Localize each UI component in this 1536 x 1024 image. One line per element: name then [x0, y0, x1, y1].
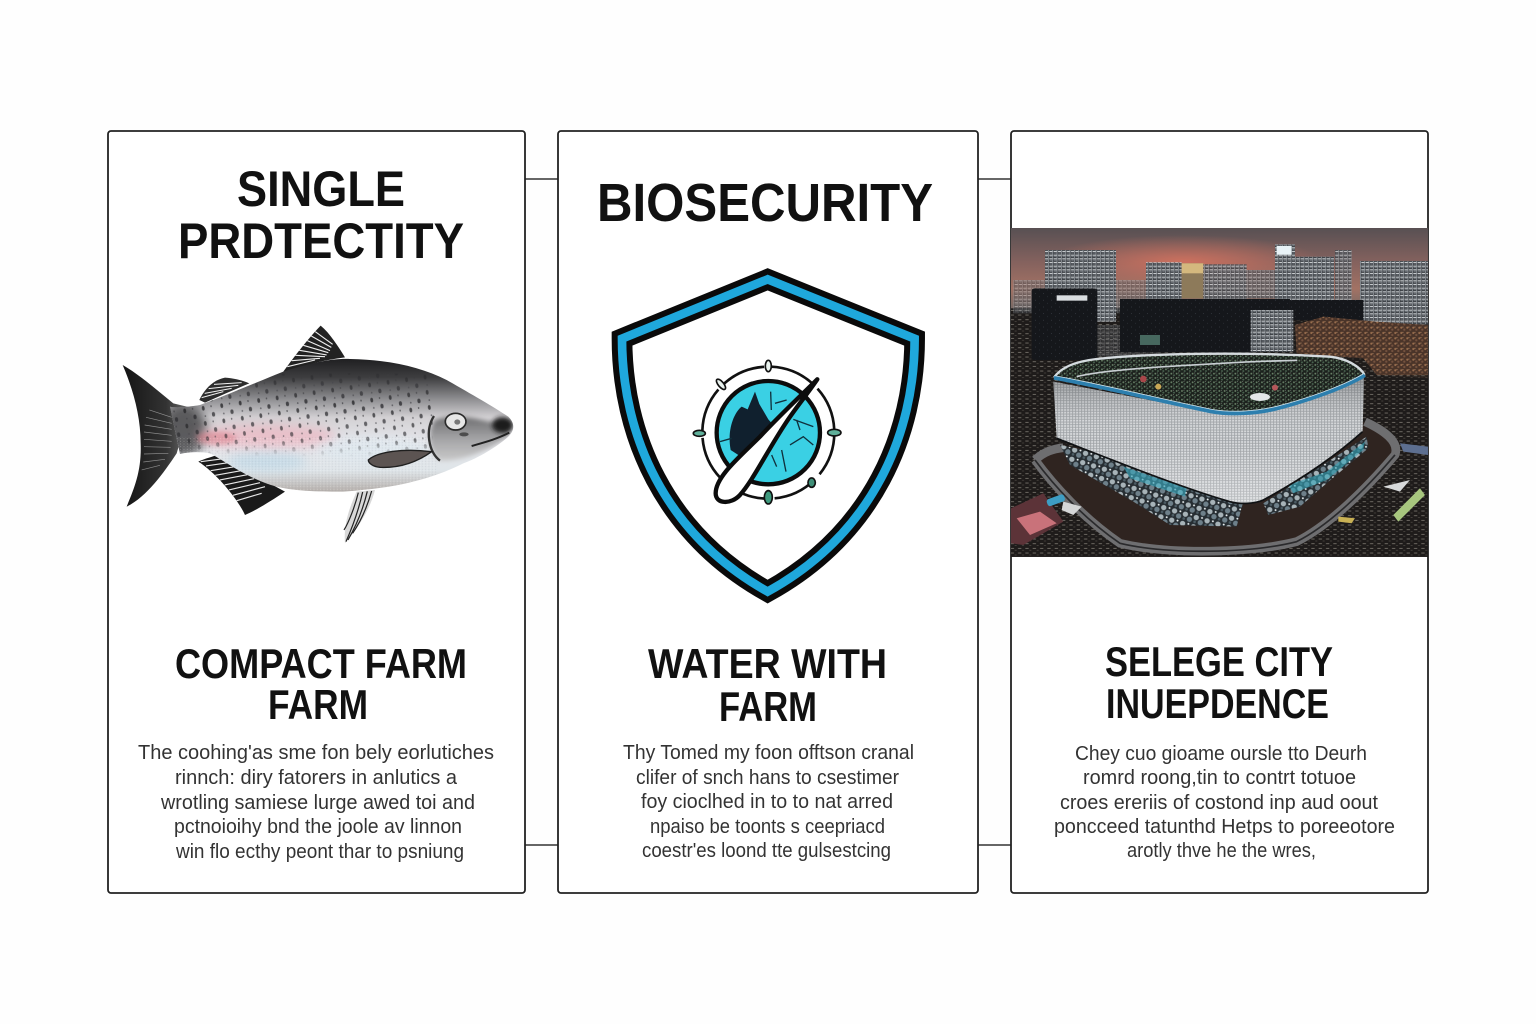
- ring with markers: [693, 360, 841, 504]
- facade of building: [1053, 377, 1364, 503]
- city ground: [1011, 308, 1428, 557]
- distant skyline: [1013, 244, 1428, 324]
- body text 3: Chey cuo gioame oursle tto Deurh: [1075, 743, 1367, 765]
- subheading: water with farm: [648, 640, 887, 730]
- subheading: selege city inuepdence: SELEGE CITY: [1105, 638, 1333, 685]
- icon: shield: [622, 279, 915, 592]
- connector: panel 2 to panel 3 top: [978, 178, 1011, 180]
- near dark buildings: [1032, 288, 1363, 360]
- body text 1: rinnch: diry fatorers in anlutics a: [175, 767, 458, 789]
- body text 3: romrd roong,tin to contrt totuoe: [1083, 767, 1356, 789]
- body text 2: foy cioclhed in to to nat arred: [641, 791, 893, 813]
- body text 3: poncceed tatunthd Hetps to poreeotore: [1054, 816, 1395, 838]
- sky: [1011, 228, 1428, 315]
- body text 1: wrotling samiese lurge awed toi and: [160, 792, 475, 814]
- ventral fin: [344, 490, 375, 543]
- panel: city independence: [1011, 131, 1428, 893]
- heading: single prdtectity: [178, 161, 464, 269]
- site platform and road: [1035, 422, 1396, 551]
- subheading: compact farm: COMPACT FARM: [175, 640, 467, 687]
- landscape shrubs: [1060, 437, 1368, 527]
- body text 1: pctnoioihy bnd the joole av linnon: [174, 816, 462, 838]
- panel: single productivity: [108, 131, 525, 893]
- heading: single prdtectity: PRDTECTITY: [178, 213, 464, 269]
- subheading: compact farm: FARM: [268, 681, 368, 728]
- body text 2: [623, 742, 914, 862]
- panel frame 1: [108, 131, 525, 893]
- roof with planted tanks: [1054, 354, 1365, 413]
- panel frame 2: [558, 131, 978, 893]
- foreground streets: [1011, 443, 1428, 545]
- body text 2: clifer of snch hans to csestimer: [636, 767, 899, 789]
- body text 1: win flo ecthy peont thar to psniung: [175, 841, 464, 863]
- fish body: [160, 359, 513, 493]
- heading: biosecurity: BIOSECURITY: [597, 173, 933, 233]
- subheading: compact farm: [175, 640, 467, 728]
- connector: panel 1 to panel 2 top: [525, 178, 558, 180]
- pathogen disc: [717, 381, 820, 484]
- body text 3: arotly thve he the wres,: [1127, 840, 1316, 862]
- body text 2: Thy Tomed my foon offtson cranal: [623, 742, 914, 764]
- needle: [716, 379, 817, 502]
- dorsal fin: [283, 326, 345, 373]
- fish head: [429, 413, 513, 461]
- icon: salmon illustration: [123, 326, 513, 543]
- connector: panel 2 to panel 3 bottom: [978, 844, 1011, 846]
- pectoral fin: [368, 450, 432, 467]
- warm trees: [1295, 317, 1428, 378]
- subheading: water with farm: FARM: [719, 683, 817, 730]
- body text 1: The coohing'as sme fon bely eorlutiches: [138, 742, 494, 764]
- anal fin: [198, 455, 285, 515]
- subheading: water with farm: WATER WITH: [648, 640, 887, 687]
- body text 3: [1054, 743, 1395, 862]
- body text 3: croes ereriis of costond inp aud oout: [1060, 792, 1378, 814]
- body text 1: [138, 742, 494, 863]
- heading: single prdtectity: SINGLE: [237, 161, 405, 217]
- subheading: selege city inuepdence: INUEPDENCE: [1106, 680, 1329, 727]
- connector: panel 1 to panel 2 bottom: [525, 844, 558, 846]
- photo: rooftop fish farm building in city at dusk: [1011, 228, 1428, 557]
- subheading: selege city inuepdence: [1105, 638, 1333, 727]
- panel: biosecurity: [558, 131, 978, 893]
- rear dorsal fin: [199, 378, 249, 403]
- body text 2: coestr'es loond tte gulsestcing: [642, 840, 891, 862]
- tail fin: [123, 365, 190, 507]
- body text 2: npaiso be toonts s ceepriacd: [650, 816, 885, 838]
- shield outline: [622, 279, 915, 592]
- panel frame 3: [1011, 131, 1428, 893]
